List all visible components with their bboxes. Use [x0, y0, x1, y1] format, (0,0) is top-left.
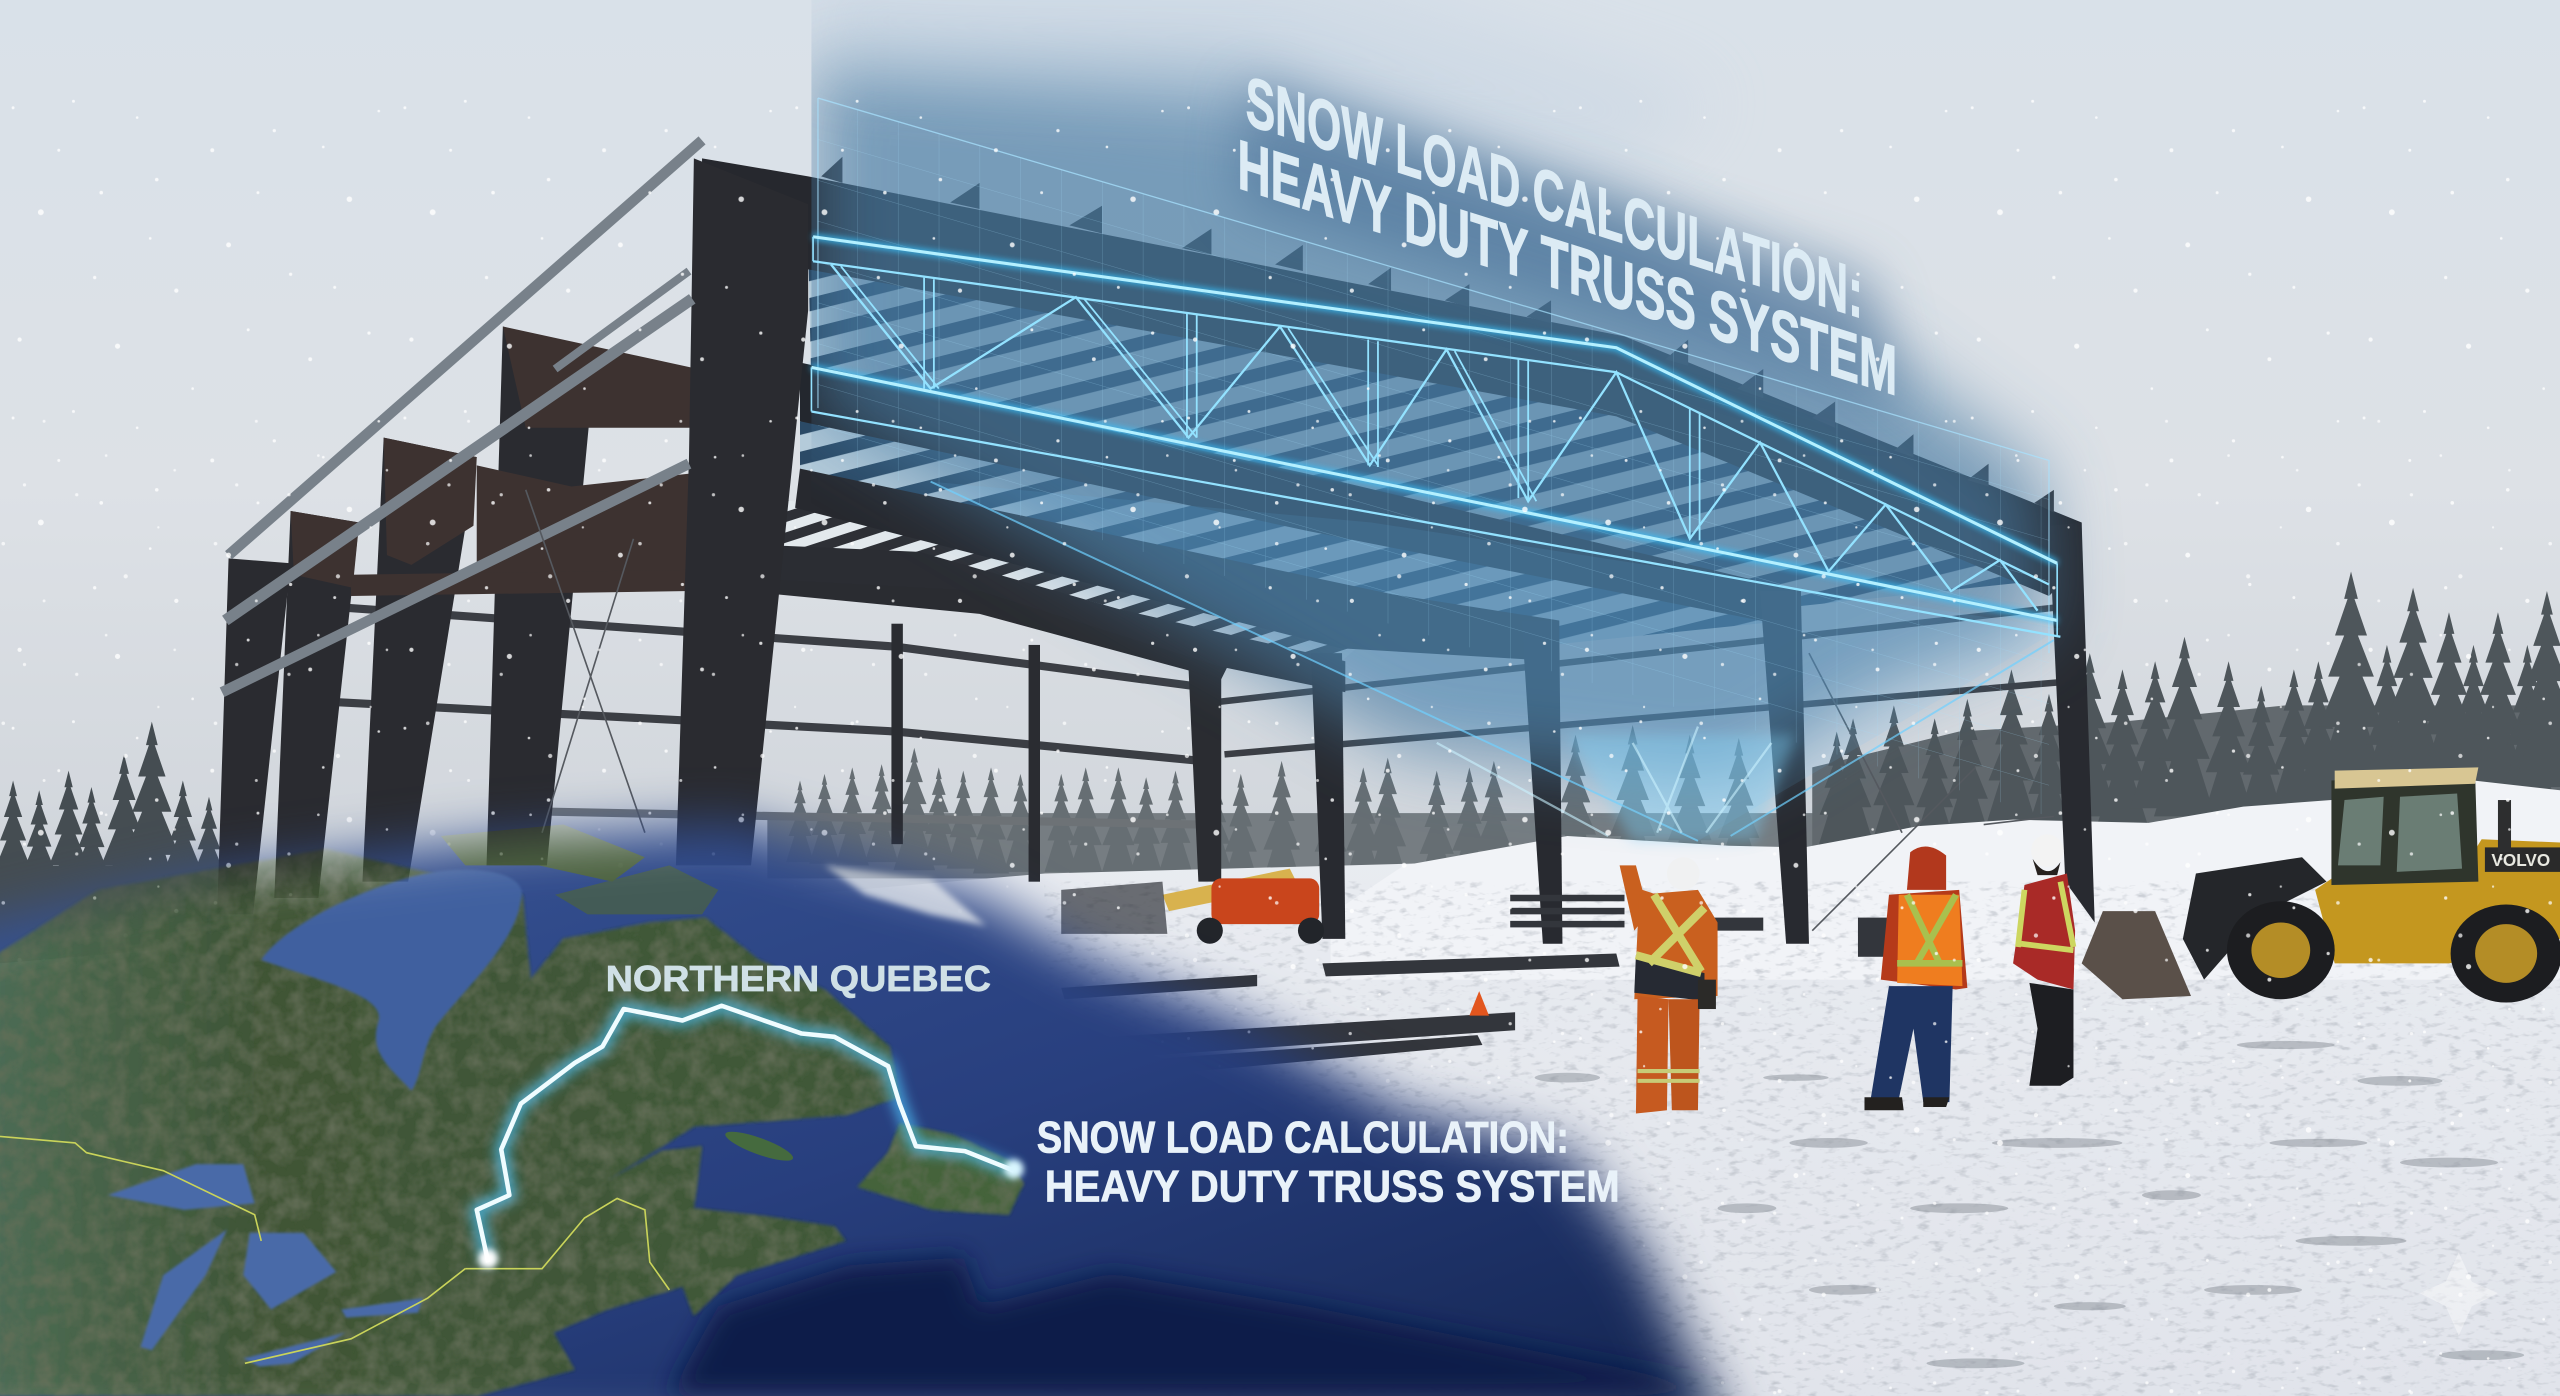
snow ground — [0, 833, 2560, 1396]
deep ocean — [669, 1257, 1763, 1396]
roof panels, first bay — [808, 245, 2049, 607]
roof panels, third bay — [777, 498, 1388, 669]
front wheel — [2227, 901, 2335, 999]
map label: region: NORTHERN QUEBEC — [606, 958, 991, 999]
sky background — [0, 0, 2560, 980]
land — [0, 849, 900, 1396]
boom lift — [1162, 869, 1324, 944]
title — [1238, 62, 1897, 411]
ground speckle texture — [1045, 980, 2560, 1396]
truss wireframe — [811, 237, 2060, 637]
wheel loader — [2082, 767, 2560, 1003]
ocean — [0, 767, 1796, 1396]
snow bank behind site — [1331, 780, 2560, 980]
blueprint glow — [811, 0, 2049, 784]
rear wheel — [2451, 905, 2560, 1003]
map overlay — [0, 767, 1796, 1396]
purlin brackets — [821, 157, 2054, 513]
frame 2 rafter — [800, 362, 1801, 629]
Volvo plate: VOLVO — [2491, 850, 2550, 870]
frame 5 rafter — [777, 578, 1228, 679]
back wall girts — [294, 604, 2057, 825]
route start point — [478, 1249, 498, 1269]
stacked steel and rack — [1061, 882, 1887, 1078]
bucket — [2082, 911, 2191, 999]
Great Lakes — [108, 1164, 423, 1367]
map callout — [1037, 1114, 1620, 1212]
galvanized girts — [222, 140, 702, 692]
frame 4 rafter — [774, 545, 1345, 692]
top rafter beam — [702, 158, 2082, 596]
falling snow: second layer — [0, 408, 2560, 1396]
hanging brace wires — [526, 490, 2054, 931]
worker 1: orange coveralls, raising arm — [1620, 857, 1718, 1114]
light rays from site to truss — [931, 482, 2060, 841]
main front column — [676, 158, 808, 865]
right side columns — [1311, 522, 2095, 944]
lift arm — [2183, 857, 2327, 980]
arctic islands — [441, 825, 718, 914]
title: SNOW LOAD CALCULATION: — [1246, 62, 1863, 334]
back wall columns — [891, 624, 1221, 882]
site: boom lift and materials — [1061, 869, 1887, 1078]
roof panels, fourth bay — [800, 571, 1257, 673]
provincial and national borders — [0, 1136, 669, 1363]
Greenland — [824, 865, 986, 926]
Hudson Bay — [261, 870, 522, 1091]
tree line: left — [0, 722, 229, 963]
watermark sparkle — [2420, 1252, 2498, 1336]
brown bracing between frames — [291, 327, 691, 596]
Anticosti island — [725, 1132, 793, 1161]
route end point — [1004, 1159, 1024, 1179]
web members — [831, 265, 2038, 611]
map callout: HEAVY DUTY TRUSS SYSTEM — [1045, 1163, 1620, 1212]
worker 2: high-visibility vest — [1864, 846, 1967, 1110]
bottom chord — [811, 367, 2057, 620]
grid outline — [818, 98, 2049, 653]
frame 3 rafter — [795, 469, 1559, 661]
traffic cone — [1469, 991, 1489, 1016]
title backdrop shadow — [1238, 82, 1902, 408]
map callout: SNOW LOAD CALCULATION: — [1037, 1114, 1569, 1163]
roof panels, second bay — [800, 416, 1788, 645]
tree line: right — [1812, 571, 2560, 914]
Newfoundland — [857, 1123, 1024, 1215]
Volvo plate — [2485, 847, 2560, 872]
exhaust — [2498, 800, 2511, 852]
blueprint grid — [818, 98, 2049, 816]
ground texture marks — [1535, 1041, 2524, 1368]
steel frame — [217, 140, 2095, 944]
cab — [2331, 774, 2478, 885]
title: HEAVY DUTY TRUSS SYSTEM — [1238, 125, 1897, 411]
worker 3: red jacket, white helmet — [2013, 834, 2075, 1086]
tree line: centre — [767, 725, 1829, 893]
top chord — [813, 237, 2057, 563]
body — [2315, 839, 2560, 963]
back-left columns — [217, 327, 596, 914]
glowing route — [477, 1006, 1014, 1262]
